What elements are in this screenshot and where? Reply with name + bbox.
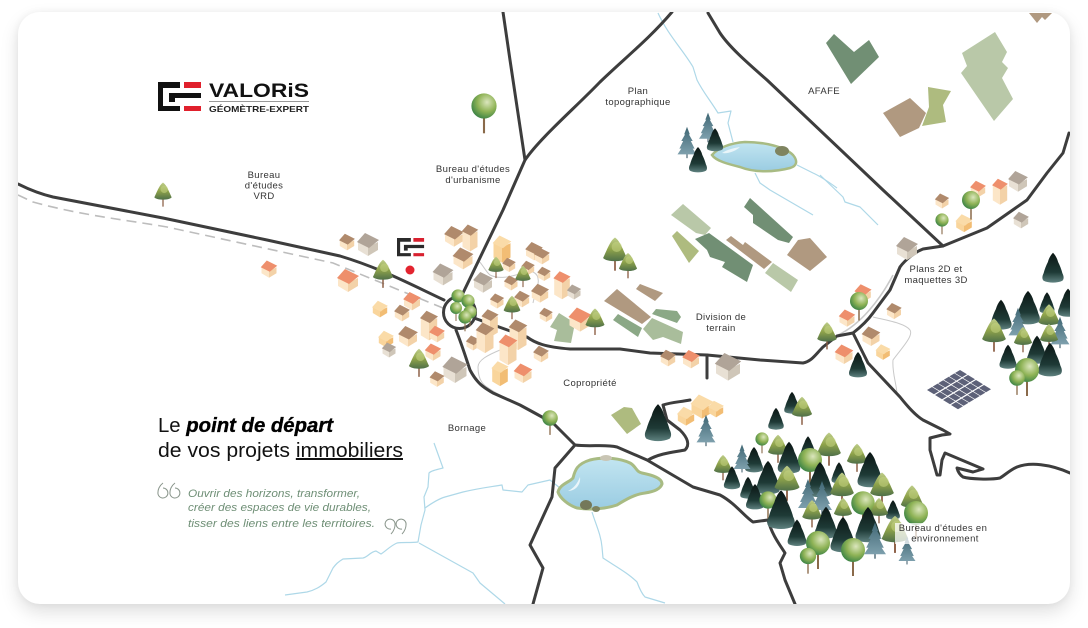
label: Bureau d'études VRD: VRD xyxy=(253,191,275,202)
label: Division de terrain: Division de xyxy=(696,312,746,323)
label: Bureau d'études en environnement: Bureau d'études en xyxy=(899,523,987,534)
heading line 2: de vos projets immobiliers xyxy=(158,440,403,462)
logo rule xyxy=(209,101,309,102)
tagline: GÉOMÈTRE-EXPERT xyxy=(209,104,310,114)
quote: créer des espaces de vie durables, xyxy=(188,502,371,514)
quote text: Ouvrir des horizons, transformer, xyxy=(188,488,360,500)
label: Plans 2D et maquettes 3D: maquettes 3D xyxy=(904,275,968,286)
east forest xyxy=(982,253,1078,396)
dashed road xyxy=(18,195,443,308)
quote: tisser des liens entre les territoires. xyxy=(188,518,375,530)
label: AFAFE: AFAFE xyxy=(808,86,840,97)
south forest xyxy=(714,392,928,576)
label: Bornage: Bornage xyxy=(448,423,486,434)
map labels xyxy=(245,86,987,544)
quote xyxy=(158,483,406,534)
opening quote mark xyxy=(158,483,180,498)
village houses xyxy=(261,224,741,426)
logo mark xyxy=(158,82,201,111)
logo icon on map xyxy=(397,238,424,256)
solar panels xyxy=(927,370,991,409)
village and roadside trees xyxy=(154,93,980,446)
logo xyxy=(158,80,310,114)
label: Bureau d'études d'urbanisme: d'urbanisme xyxy=(445,175,501,186)
label background: environnement xyxy=(895,523,922,544)
wordmark: VALORiS xyxy=(209,80,309,102)
heading line 1: Le point de départ xyxy=(158,415,334,437)
label: Bureau d'études d'urbanisme: Bureau d'études xyxy=(436,164,510,175)
label: Bureau d'études VRD: d'études xyxy=(245,180,283,192)
label: Plans 2D et maquettes 3D: Plans 2D et xyxy=(910,264,962,275)
fields: AFAFE xyxy=(826,13,1052,137)
heading xyxy=(158,415,403,462)
closing quote mark xyxy=(385,519,406,534)
label: Plan topographique: Plan xyxy=(628,86,648,97)
fields: division de terrain xyxy=(550,198,827,434)
east hamlet houses xyxy=(835,171,1029,364)
lake north xyxy=(712,142,796,171)
rivers xyxy=(285,13,878,604)
label: Division de terrain: terrain xyxy=(706,323,736,334)
lake south xyxy=(558,455,662,512)
map marker: red dot xyxy=(406,266,414,274)
label: Copropriété: Copropriété xyxy=(563,378,617,389)
label: Plan topographique: topographique xyxy=(605,97,671,108)
label: Bureau d'études VRD: Bureau xyxy=(248,170,280,181)
thin secondary paths xyxy=(478,260,911,418)
label: Bureau d'études en environnement: environnement xyxy=(911,534,979,544)
